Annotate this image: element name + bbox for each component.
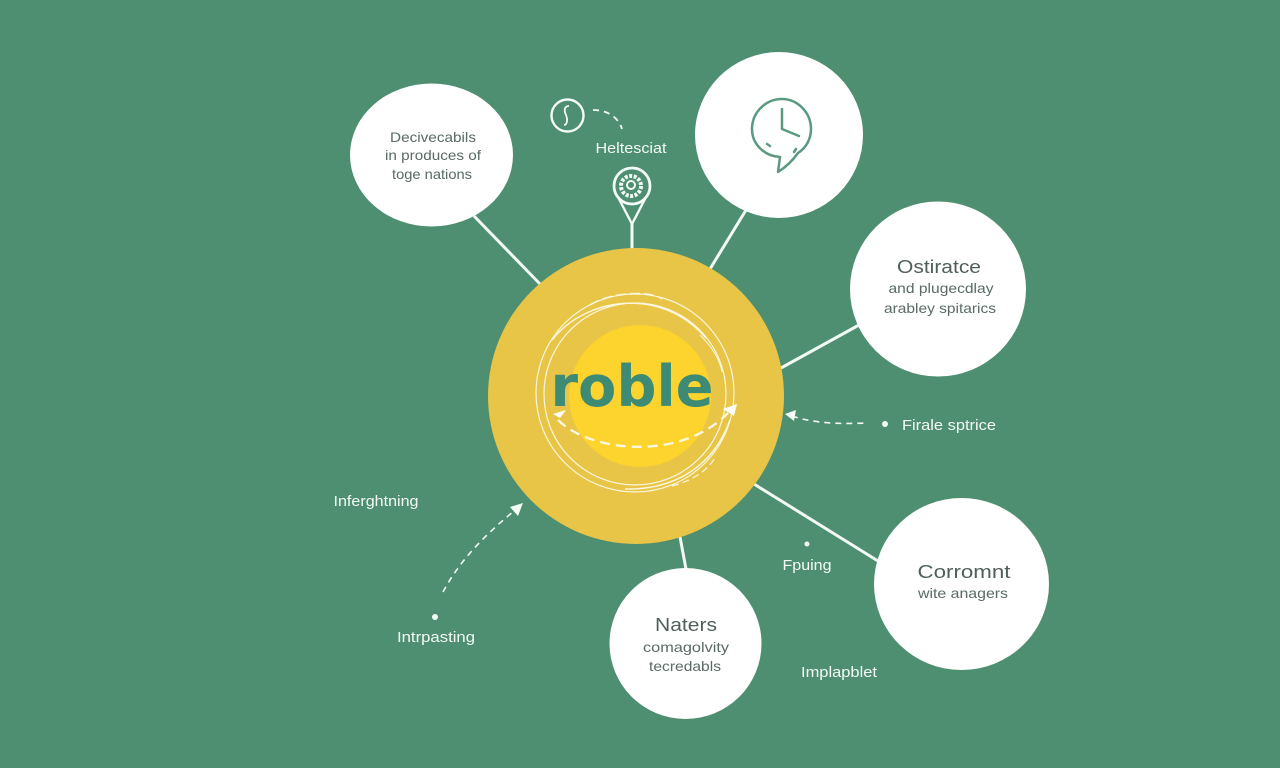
panel: bottom circle: tecredabls — [649, 658, 721, 674]
label: Intrpasting with arrow — [397, 503, 523, 646]
panel: bottom circle — [610, 568, 762, 719]
panel: bottom circle: comagolvity — [643, 639, 729, 655]
panel: lower-right circle: Corromnt — [918, 562, 1010, 582]
panel: bottom circle: Naters — [655, 615, 717, 635]
icon: map pin — [614, 168, 650, 226]
label: Heltesciat: Heltesciat — [596, 140, 667, 157]
central circle: roble — [488, 248, 784, 544]
label: Implapblet: Implapblet — [801, 664, 878, 681]
icon: S circle with dashed arc — [552, 100, 622, 132]
label: Fpuing: Fpuing — [782, 557, 832, 574]
title text: roble — [550, 354, 714, 420]
label: Firale sptrice with arrow: Firale sptrice — [902, 417, 996, 434]
connector lines — [474, 210, 878, 569]
panel: clock circle — [695, 52, 863, 218]
panel: top-left circle: in produces of — [385, 147, 481, 163]
label: Fpuing — [782, 542, 832, 574]
icon: clock speech bubble — [752, 99, 811, 172]
panel: lower-right circle — [874, 498, 1049, 670]
panel: top-left circle: Decivecabils — [390, 129, 476, 145]
label: Inferghtning: Inferghtning — [334, 493, 418, 510]
panel: right circle: and plugecdlay — [888, 280, 994, 296]
label: Intrpasting with arrow: Intrpasting — [397, 629, 475, 646]
label: Firale sptrice with arrow — [785, 410, 996, 434]
panel: right circle — [850, 202, 1026, 376]
panel: top-left circle — [350, 84, 513, 226]
panel: top-left circle: toge nations — [392, 166, 472, 182]
dashed cycle arrow — [553, 404, 737, 447]
panel: right circle: arabley spitarics — [884, 300, 996, 316]
panel: lower-right circle: wite anagers — [917, 585, 1008, 601]
orbit rings — [536, 293, 734, 492]
panel: right circle: Ostiratce — [897, 257, 981, 277]
